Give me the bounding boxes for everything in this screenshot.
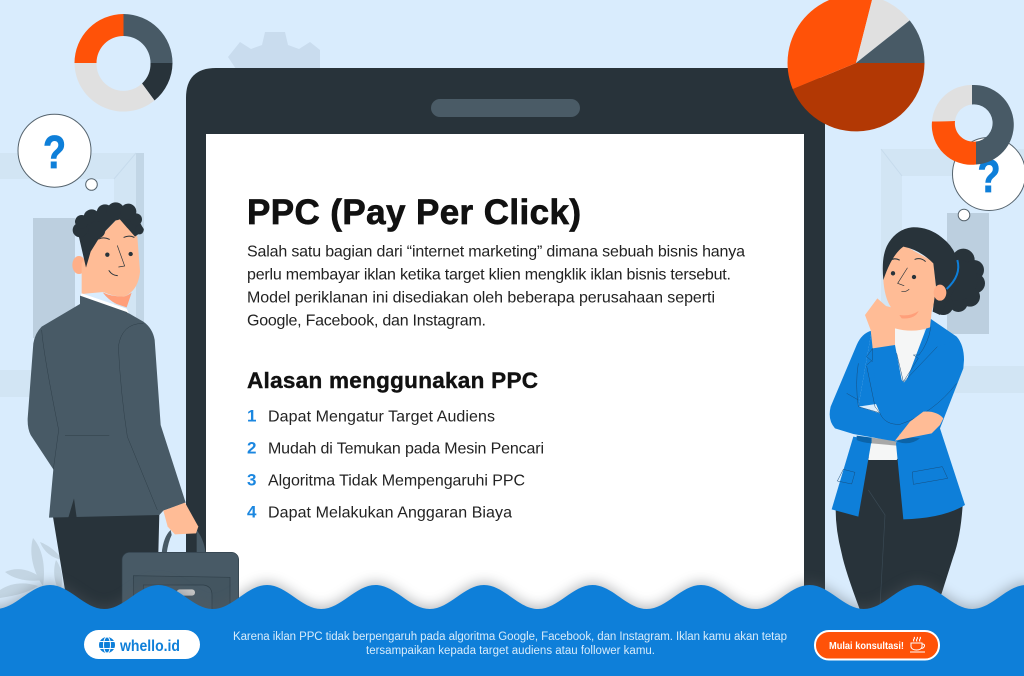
face and neck bbox=[883, 245, 937, 331]
trousers bbox=[53, 513, 159, 620]
tablet speaker pill bbox=[431, 99, 580, 117]
head bbox=[883, 227, 958, 331]
logo pill: whello.id bbox=[119, 638, 180, 655]
reason 2: Mudah di Temukan pada Mesin Pencari bbox=[268, 440, 544, 458]
icon: globe bbox=[99, 637, 115, 653]
man with briefcase bbox=[28, 202, 239, 622]
gear behind tablet bbox=[228, 32, 320, 72]
hair bbox=[73, 202, 144, 268]
description paragraph: perlu membayar iklan ketika target klien mengklik iklan bisnis tersebut. bbox=[247, 266, 731, 284]
background frame right bbox=[881, 149, 1024, 393]
woman thinking bbox=[830, 227, 985, 620]
face details bbox=[105, 252, 109, 257]
hand on chin bbox=[865, 298, 910, 348]
reason 3: 3 bbox=[247, 470, 256, 490]
thought bubble right bbox=[952, 138, 1024, 221]
donut chart right bbox=[932, 85, 1014, 165]
plant bottom left bbox=[0, 538, 62, 598]
hair bun bbox=[933, 249, 985, 315]
jacket bbox=[28, 296, 186, 518]
footer wave band bbox=[0, 585, 1024, 676]
reason 1: 1 bbox=[247, 406, 256, 426]
hair bbox=[883, 227, 957, 315]
head bbox=[72, 202, 144, 314]
donut chart top left bbox=[74, 14, 172, 112]
reason 4: Dapat Melakukan Anggaran Biaya bbox=[268, 504, 512, 522]
hand bbox=[163, 503, 198, 534]
reason 4: 4 bbox=[247, 502, 257, 522]
footer message: tersampaikan kepada target audiens atau follower kamu. bbox=[366, 645, 655, 657]
jacket bbox=[830, 318, 965, 519]
tablet bbox=[186, 68, 825, 624]
description paragraph: Google, Facebook, dan Instagram. bbox=[247, 312, 486, 330]
wave shadow bbox=[0, 582, 1024, 676]
reasons list bbox=[247, 406, 544, 522]
subheading: Alasan menggunakan PPC bbox=[247, 368, 538, 393]
footer message: Karena iklan PPC tidak berpengaruh pada algoritma Google, Facebook, dan Instagram. Iklan kamu akan tetap bbox=[233, 631, 787, 643]
thought bubble left bbox=[18, 114, 97, 190]
thought bubble right: ? bbox=[977, 150, 1001, 202]
tablet screen bbox=[206, 134, 804, 624]
white shirt bbox=[868, 327, 940, 460]
trousers bbox=[836, 457, 963, 620]
tablet body bbox=[186, 68, 825, 620]
pie chart top right bbox=[788, 0, 925, 131]
description paragraph: Model periklanan ini disediakan oleh beberapa perusahaan seperti bbox=[247, 290, 715, 306]
briefcase bbox=[122, 528, 239, 622]
face details bbox=[891, 271, 895, 275]
description paragraph bbox=[247, 244, 745, 330]
reason 1: Dapat Mengatur Target Audiens bbox=[268, 408, 495, 426]
reason 2: 2 bbox=[247, 438, 256, 458]
hair band bbox=[947, 260, 958, 289]
thought bubble left: ? bbox=[43, 126, 66, 178]
lower hand bbox=[895, 412, 943, 441]
call to action button bbox=[815, 631, 939, 660]
reason 3: Algoritma Tidak Mempengaruhi PPC bbox=[268, 472, 525, 490]
collar bbox=[80, 293, 129, 313]
ear bbox=[934, 285, 946, 301]
call to action button: Mulai konsultasi! bbox=[829, 641, 904, 652]
logo pill bbox=[84, 630, 200, 659]
face and neck bbox=[82, 218, 140, 297]
background frame left bbox=[0, 153, 144, 397]
icon: coffee cup bbox=[910, 637, 925, 652]
belt bbox=[872, 438, 897, 446]
description paragraph: Salah satu bagian dari “internet marketing” dimana sebuah bisnis hanya bbox=[247, 244, 745, 260]
footer message bbox=[233, 631, 787, 657]
title: PPC (Pay Per Click) bbox=[247, 193, 581, 232]
